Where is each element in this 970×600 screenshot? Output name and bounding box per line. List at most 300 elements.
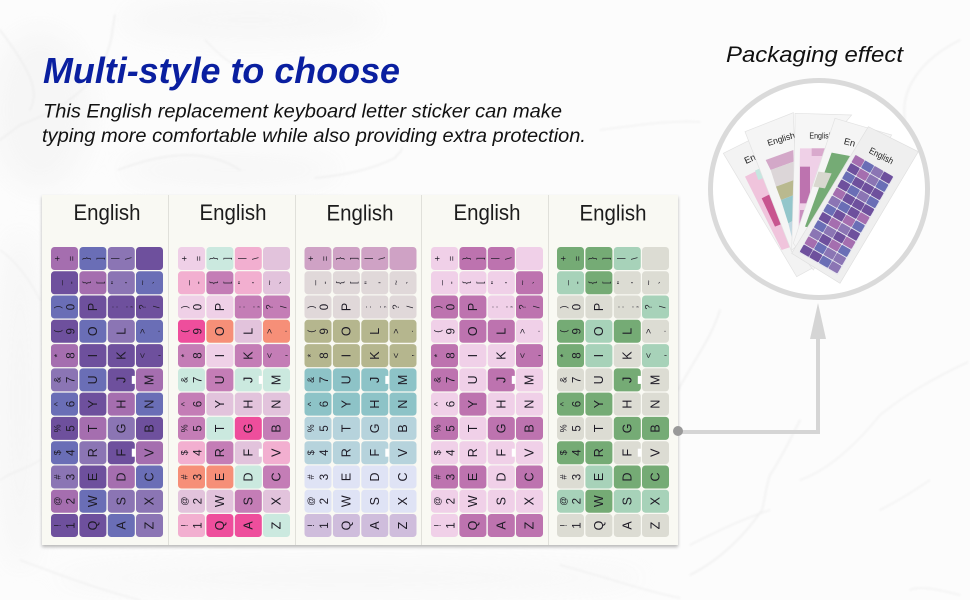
sheet 3 keys: pastel bands: % — [306, 424, 316, 432]
sheet 1 keys: purple: E — [86, 473, 100, 481]
sheet 1 keys: purple: ; — [123, 306, 133, 308]
sheet 1 keys: purple: F — [114, 449, 128, 457]
sheet 4 keys: two-tone pink: 1 — [446, 522, 458, 529]
sheet 5 keys: green: S — [620, 497, 634, 505]
sheet 4 keys: two-tone pink: E — [466, 473, 480, 481]
sheet 5 keys: green: T — [592, 424, 606, 432]
sheet 3 keys: pastel bands: A — [368, 521, 382, 530]
sheet 5 keys: green: 2 — [572, 498, 584, 504]
package: olive and teal — [745, 113, 798, 257]
sheet 2 keys: pink, mint and coral: 6 — [192, 401, 204, 407]
sheet 1 keys: purple: " — [109, 281, 119, 284]
sheet 1 keys: purple: Y — [86, 399, 100, 408]
sheet 4 keys: two-tone pink: 5 — [446, 425, 458, 432]
sheet 4 keys: two-tone pink: ; — [503, 306, 513, 308]
sheet 2 keys: pink, mint and coral: ; — [250, 306, 260, 308]
sheet 1 keys: purple: ! — [52, 524, 62, 527]
package: two-tone pink — [792, 113, 852, 250]
sheet 3 keys: pastel bands: _ — [306, 279, 316, 286]
sheet 2 keys: pink, mint and coral: < — [264, 353, 274, 358]
sheet 5 keys: green: $ — [558, 450, 568, 455]
sheet 4 keys: two-tone pink: X — [522, 496, 536, 505]
sheet 3 keys: pastel bands: ] — [348, 257, 358, 260]
sheet 5 keys: green: ? — [644, 304, 654, 310]
sheet 2 keys: pink, mint and coral: $ — [180, 450, 190, 455]
sheet 5 keys: green: N — [648, 400, 662, 409]
sheet 2 keys: pink, mint and coral: } — [208, 257, 218, 260]
sheet 3 keys: pastel bands: | — [363, 257, 373, 260]
description text: This English replacement keyboard letter sticker can make — [43, 100, 562, 122]
sheet 1 keys: purple: J — [114, 377, 128, 383]
sheet 2 keys: pink, mint and coral — [178, 247, 290, 537]
sheet 2 keys: pink, mint and coral: W — [213, 495, 227, 507]
sheet 1 keys: purple: Z — [142, 521, 156, 529]
sheet 4 keys: two-tone pink: ^ — [432, 401, 442, 406]
sheet 1 keys: purple: + — [52, 256, 62, 261]
sheet 1 keys: purple: / — [152, 305, 162, 308]
sheet 3 keys: pastel bands: U — [339, 375, 353, 384]
sheet 2 keys: pink, mint and coral: ) — [180, 306, 190, 308]
sheet 1 keys: purple: # — [52, 474, 62, 480]
sheet 3 keys: pastel bands: 5 — [319, 425, 331, 432]
sheet 4 keys: two-tone pink: Q — [466, 520, 480, 530]
sheet 2 keys: pink, mint and coral: = — [194, 256, 204, 261]
sheet 2 keys: pink, mint and coral: T — [213, 424, 227, 432]
sheet 5 keys: green: D — [620, 472, 634, 482]
sheet 2 keys: pink, mint and coral: K — [241, 351, 255, 360]
sheet 2 keys: pink, mint and coral: V — [270, 448, 284, 457]
sheet 2 keys: pink, mint and coral: | — [236, 257, 246, 260]
sheet 4 keys: two-tone pink: ~ — [518, 280, 528, 285]
sheet 3 keys: pastel bands: V — [396, 448, 410, 457]
sheet 5 keys: green: 8 — [572, 352, 584, 359]
sheet 4 keys: two-tone pink: R — [466, 448, 480, 457]
sheet 5 keys: green: Q — [592, 520, 606, 530]
sheet 2 keys: pink, mint and coral: # — [180, 474, 190, 480]
sheet 1 keys: purple: G — [114, 424, 128, 433]
sheet 3 keys: pastel bands: P — [339, 303, 353, 311]
sheet 2 heading: English — [200, 200, 266, 225]
sheet 4 keys: two-tone pink: { — [461, 281, 471, 284]
sheet 4 keys: two-tone pink: 6 — [446, 401, 458, 407]
sheet 3 keys: pastel bands: S — [368, 497, 382, 505]
sheet 5 keys: green: { — [587, 281, 597, 284]
sheet 2 keys: pink, mint and coral: 0 — [192, 304, 204, 310]
sheet 2 keys: pink, mint and coral: F — [241, 449, 255, 457]
sheet 3 keys: pastel bands: O — [339, 326, 353, 336]
title: Multi-style to choose — [43, 50, 400, 91]
sheet 1 keys: purple: ` — [152, 281, 162, 284]
sheet 1 keys: purple: 6 — [66, 401, 78, 407]
sheet 4 keys: two-tone pink: L — [494, 328, 508, 335]
sheet 5 keys: green: U — [592, 375, 606, 384]
sheet 1 keys: purple: % — [52, 424, 62, 432]
package: pink: En — [743, 152, 757, 166]
sheet 3 keys: pastel bands: N — [396, 400, 410, 409]
sheet 1 keys: purple: K — [114, 351, 128, 360]
sheet 4 keys: two-tone pink: % — [432, 424, 442, 432]
sheet 5 keys: green: 9 — [572, 328, 584, 335]
sheet 5 keys: green: ; — [629, 306, 639, 308]
sheet 1 keys: purple: - — [66, 281, 76, 284]
sheet 1 keys: purple: | — [109, 257, 119, 260]
sheet 2 keys: pink, mint and coral: R — [213, 448, 227, 457]
sheet 1 keys: purple: \ — [123, 257, 133, 260]
sheet 3 keys: pastel bands: 0 — [319, 304, 331, 310]
sheet 3 keys: pastel bands: ( — [306, 330, 316, 333]
sheet 3 keys: pastel bands: Z — [396, 521, 410, 529]
sheet 2 keys: pink, mint and coral: @ — [180, 497, 190, 506]
sheet 3 keys: pastel bands: + — [306, 256, 316, 261]
sheet 1 keys: purple: O — [86, 326, 100, 336]
sheet 2 keys: pink, mint and coral: 5 — [192, 425, 204, 432]
sheet 1 keys: purple: ' — [123, 282, 133, 284]
sheet 4 keys: two-tone pink: \ — [503, 257, 513, 260]
sheet 1 keys: purple: ~ — [138, 280, 148, 285]
sheet 2 keys: pink, mint and coral: , — [278, 354, 288, 357]
sheet 1 keys: purple: ) — [52, 306, 62, 308]
sheet 5 keys: green: / — [658, 305, 668, 308]
sheet 4 keys: two-tone pink: K — [494, 351, 508, 360]
sheet 3 keys: pastel bands: 6 — [319, 401, 331, 407]
sheet 3 keys: pastel bands: G — [368, 424, 382, 433]
sheet 5 keys: green: C — [648, 472, 662, 482]
sheet 1 keys: purple: * — [52, 353, 62, 357]
sheet 3 keys: pastel bands: . — [405, 330, 415, 333]
sheet 1 keys: purple — [51, 247, 163, 537]
sheet 1 keys: purple: [ — [95, 281, 105, 284]
sheet 4 keys: two-tone pink: | — [489, 257, 499, 260]
sheet 5 keys: green: V — [648, 448, 662, 457]
sheet 3 keys: pastel bands: " — [363, 281, 373, 284]
sheet 3 keys: pastel bands: M — [396, 375, 410, 385]
sheet 3 keys: pastel bands: K — [368, 351, 382, 360]
sheet 5 keys: green: B — [648, 424, 662, 433]
sheet 1 keys: purple: T — [86, 424, 100, 432]
sticker sheets row — [42, 195, 678, 545]
sheet 4 keys: two-tone pink: ( — [432, 330, 442, 333]
package: olive and teal: English — [766, 130, 796, 148]
sheet 4 keys: two-tone pink: < — [518, 353, 528, 358]
sheet 3 keys: pastel bands: } — [334, 257, 344, 260]
sheet 3 keys: pastel bands: J — [368, 377, 382, 383]
sheet 5 keys: green: M — [648, 375, 662, 385]
sheet 2 keys: pink, mint and coral: & — [180, 377, 190, 383]
sheet 1 keys: purple: ^ — [52, 401, 62, 406]
sheet 3 keys: pastel bands: 9 — [319, 328, 331, 335]
sheet 3 keys: pastel bands: 3 — [319, 474, 331, 480]
sheet 2 keys: pink, mint and coral: / — [278, 305, 288, 308]
sheet 4 keys: two-tone pink: S — [494, 497, 508, 505]
sheet 3 keys: pastel bands: Y — [339, 399, 353, 408]
sheet 1 keys: purple: U — [86, 375, 100, 384]
sheet 4 keys: two-tone pink: . — [532, 330, 542, 333]
sheet 5 keys: green: Y — [592, 399, 606, 408]
sheet 4 keys: two-tone pink: O — [466, 326, 480, 336]
sheet 2 keys: pink, mint and coral: ^ — [180, 401, 190, 406]
sheet 3 keys: pastel bands: Q — [339, 520, 353, 530]
sheet 5 keys: green: . — [658, 330, 668, 333]
sheet 3 keys: pastel bands: X — [396, 496, 410, 505]
sheet 2 keys: pink, mint and coral: 9 — [192, 328, 204, 335]
sheet 3 keys: pastel bands: ' — [377, 282, 387, 284]
sheet 2 keys: pink, mint and coral: C — [270, 472, 284, 482]
sheet 5 keys: green: ] — [601, 257, 611, 260]
sheet 4 keys: two-tone pink: Y — [466, 399, 480, 408]
sheet 2 keys: pink, mint and coral: L — [241, 328, 255, 335]
sheet 3 keys: pastel bands: R — [339, 448, 353, 457]
sheet 4 keys: two-tone pink: J — [494, 377, 508, 383]
sheet 1 keys: purple: & — [52, 377, 62, 383]
sheet 1 keys: purple: S — [114, 497, 128, 505]
sheet 5 keys: green: ~ — [644, 280, 654, 285]
sheet 2 keys: pink, mint and coral: D — [241, 472, 255, 482]
sheet 5 keys: green: : — [615, 306, 625, 308]
sheet 3 keys: pastel bands: ; — [377, 306, 387, 308]
sheet 5 keys: green: ( — [558, 330, 568, 333]
sheet 1 keys: purple: ? — [138, 304, 148, 310]
sheet 1 keys: purple: 8 — [66, 352, 78, 359]
sheet 4 keys: two-tone pink: & — [432, 377, 442, 383]
sheet 2 keys: pink, mint and coral: ' — [250, 282, 260, 284]
sheet 2 keys: pink, mint and coral: A — [241, 521, 255, 530]
sheet 5 keys: green: \ — [629, 257, 639, 260]
sheet 5 keys: green: - — [572, 281, 582, 284]
sheet 5 keys: green: 7 — [572, 377, 584, 383]
sheet 2 keys: pink, mint and coral: B — [270, 424, 284, 433]
sheet 1 keys: purple: 3 — [66, 474, 78, 480]
sheet 2 keys: pink, mint and coral: X — [270, 496, 284, 505]
sheet 3 keys: pastel bands: ? — [391, 304, 401, 310]
sheet 5 keys: green: % — [558, 424, 568, 432]
sheet 5 keys: green: 0 — [572, 304, 584, 310]
sheet 4 keys: two-tone pink: / — [532, 305, 542, 308]
sheet 5 keys: green: I — [592, 354, 606, 357]
sheet 5 keys: green: L — [620, 328, 634, 335]
package: purple front: English — [867, 146, 895, 166]
sheet 1 keys: purple: > — [138, 329, 148, 334]
sheet 5 keys: green: 6 — [572, 401, 584, 407]
sheet 5 keys: green: | — [615, 257, 625, 260]
sheet 2 keys: pink, mint and coral: Q — [213, 520, 227, 530]
package: purple front — [792, 127, 918, 283]
sheet 4 keys: two-tone pink: I — [466, 354, 480, 357]
sheet 2 keys: pink, mint and coral: 2 — [192, 498, 204, 504]
sheet 2 keys: pink, mint and coral: _ — [180, 279, 190, 286]
sheet 1 keys: purple: L — [114, 328, 128, 335]
sheet 4 keys: two-tone pink: # — [432, 474, 442, 480]
sheet 2 keys: pink, mint and coral: * — [180, 353, 190, 357]
sheet 4 keys: two-tone pink: * — [432, 353, 442, 357]
sheet 2 keys: pink, mint and coral: \ — [250, 257, 260, 260]
sheet 3 keys: pastel bands: B — [396, 424, 410, 433]
sheet 5 keys: green: + — [558, 256, 568, 261]
sheet 2 keys: pink, mint and coral: 3 — [192, 474, 204, 480]
sheet 3 keys: pastel bands: , — [405, 354, 415, 357]
sheet backing cards — [42, 195, 678, 545]
sheet 1 keys: purple: 9 — [66, 328, 78, 335]
sheet 5 keys: green: Z — [648, 521, 662, 529]
sheet 2 keys: pink, mint and coral: 8 — [192, 352, 204, 359]
sheet 1 keys: purple: P — [86, 303, 100, 311]
sheet 3 keys: pastel bands: 8 — [319, 352, 331, 359]
sheet 5 keys: green: < — [644, 353, 654, 358]
sheet 4 keys: two-tone pink: " — [489, 281, 499, 284]
sheet 2 keys: pink, mint and coral: ] — [222, 257, 232, 260]
sheet 1 keys: purple: < — [138, 353, 148, 358]
sheet 4 heading: English — [454, 200, 520, 225]
sheet 1 keys: purple: W — [86, 495, 100, 507]
sheet 4 keys: two-tone pink: 3 — [446, 474, 458, 480]
sheet 1 keys: purple: D — [114, 472, 128, 482]
sheet 2 keys: pink, mint and coral: M — [270, 375, 284, 385]
sheet 2 keys: pink, mint and coral: : — [236, 306, 246, 308]
sheet 3 keys: pastel bands: @ — [306, 497, 316, 506]
sheet 2 keys: pink, mint and coral: 1 — [192, 522, 204, 529]
sheet 4 keys: two-tone pink: B — [522, 424, 536, 433]
sheet 3 keys: pastel bands: [ — [348, 281, 358, 284]
sheet 5 keys: green: 3 — [572, 474, 584, 480]
sheet 1 keys: purple: 2 — [66, 498, 78, 504]
sheet 3 keys: pastel bands: # — [306, 474, 316, 480]
sheet 2 keys: pink, mint and coral: + — [180, 256, 190, 261]
sheet 4 keys: two-tone pink: M — [522, 375, 536, 385]
sheet 3 keys: pastel bands: : — [363, 306, 373, 308]
sheet 1 keys: purple: @ — [52, 497, 62, 506]
sheet 2 keys: pink, mint and coral: ( — [180, 330, 190, 333]
sheet 3 keys: pastel bands: ! — [306, 524, 316, 527]
sheet 2 keys: pink, mint and coral: [ — [222, 281, 232, 284]
sheet 3 keys: pastel bands: 4 — [319, 449, 331, 456]
sheet 4 keys: two-tone pink: ! — [432, 524, 442, 527]
sheet 3 keys: pastel bands: < — [391, 353, 401, 358]
sheet 2 keys: pink, mint and coral: Y — [213, 399, 227, 408]
sheet 4 keys: two-tone pink: , — [532, 354, 542, 357]
package: pink — [723, 135, 815, 277]
sheet 2 keys: pink, mint and coral: P — [213, 303, 227, 311]
sheet 3 keys: pastel bands: * — [306, 353, 316, 357]
sheet 4 keys: two-tone pink: C — [522, 472, 536, 482]
sheet 4 keys: two-tone pink: W — [466, 495, 480, 507]
sheet 2 keys: pink, mint and coral: - — [194, 281, 204, 284]
sheet 1 keys: purple: , — [152, 354, 162, 357]
sheet 1 keys: purple: N — [142, 400, 156, 409]
sheet 3 keys: pastel bands: ~ — [391, 280, 401, 285]
sheet 3 keys: pastel bands: W — [339, 495, 353, 507]
sheet 3 keys: pastel bands: ) — [306, 306, 316, 308]
sheet 1 keys: purple: { — [81, 281, 91, 284]
sheet 1 keys: purple: 7 — [66, 377, 78, 383]
sheet 4 keys: two-tone pink: ) — [432, 306, 442, 308]
sheet 4 keys: two-tone pink: + — [432, 256, 442, 261]
sheet 1 keys: purple: _ — [52, 279, 62, 286]
sheet 4 keys: two-tone pink: - — [446, 281, 456, 284]
sheet 1 keys: purple: B — [142, 424, 156, 433]
sheet 3 keys: pastel bands: H — [368, 400, 382, 409]
sheet 3 keys: pastel bands: \ — [377, 257, 387, 260]
sheet 2 keys: pink, mint and coral: " — [236, 281, 246, 284]
sheet 5 keys: green: * — [558, 353, 568, 357]
sheet 3 heading: English — [326, 200, 394, 226]
packaging effect label: Packaging effect — [726, 42, 905, 67]
sheet 1 keys: purple: 5 — [66, 425, 78, 432]
sheet 4 keys: two-tone pink: G — [494, 424, 508, 433]
sheet 5 keys: green: " — [615, 281, 625, 284]
sheet 3 keys: pastel bands — [304, 247, 416, 537]
sheet 3 keys: pastel bands: T — [339, 424, 353, 432]
sheet 2 keys: pink, mint and coral: > — [264, 329, 274, 334]
sheet 5 keys: green — [557, 247, 669, 537]
sheet 4 keys: two-tone pink: _ — [432, 279, 442, 286]
package: green — [793, 118, 892, 270]
sheet 4 keys: two-tone pink: @ — [432, 497, 442, 506]
sheet 5 keys: green: W — [592, 495, 606, 507]
sheet 1 keys: purple: ( — [52, 330, 62, 333]
sheet 1 keys: purple: : — [109, 306, 119, 308]
sheet 1 keys: purple: X — [142, 496, 156, 505]
sheet 1 keys: purple: V — [142, 448, 156, 457]
sheet 4 keys: two-tone pink: 4 — [446, 449, 458, 456]
sheet 4 keys: two-tone pink: ` — [532, 281, 542, 284]
sheet 5 keys: green: H — [620, 400, 634, 409]
sheet 1 keys: purple: = — [66, 256, 76, 261]
sheet 3 keys: pastel bands: ` — [405, 281, 415, 284]
package: two-tone pink: English — [809, 130, 833, 140]
sheet 1 keys: purple: Q — [86, 520, 100, 530]
sheet 1 keys: purple: $ — [52, 450, 62, 455]
sheet 5 keys: green: ` — [658, 281, 668, 284]
sheet 3 keys: pastel bands: 7 — [319, 377, 331, 383]
sheet 5 keys: green: R — [592, 448, 606, 457]
sheet 4 keys: two-tone pink: P — [466, 303, 480, 311]
sheet 4 keys: two-tone pink: D — [494, 472, 508, 482]
sheet 4 keys: two-tone pink: Z — [522, 521, 536, 529]
sheet 3 keys: pastel bands: - — [320, 281, 330, 284]
sheet 5 keys: green: , — [658, 354, 668, 357]
sheet 4 keys: two-tone pink: 7 — [446, 377, 458, 383]
sheet 2 keys: pink, mint and coral: % — [180, 424, 190, 432]
sheet 2 keys: pink, mint and coral: ~ — [264, 280, 274, 285]
sheet 3 keys: pastel bands: = — [320, 256, 330, 261]
sheet 3 keys: pastel bands: ^ — [306, 401, 316, 406]
connector arrow from sheet to packaging — [673, 303, 826, 436]
sheet 4 keys: two-tone pink: [ — [475, 281, 485, 284]
sheet 4 keys: two-tone pink: 0 — [446, 304, 458, 310]
sheet 4 keys: two-tone pink: F — [494, 449, 508, 457]
sheet 3 keys: pastel bands: L — [368, 328, 382, 335]
description text: typing more comfortable while also providing extra protection. — [42, 125, 586, 147]
sheet 4 keys: two-tone pink: : — [489, 306, 499, 308]
sheet 2 keys: pink, mint and coral: ` — [278, 281, 288, 284]
package: green: En — [843, 136, 856, 149]
sheet 1 keys: purple: I — [86, 354, 100, 357]
sheet 5 keys: green: 1 — [572, 522, 584, 529]
sheet 2 keys: pink, mint and coral: Z — [270, 521, 284, 529]
sheet 1 keys: purple: H — [114, 400, 128, 409]
sheet 3 keys: pastel bands: D — [368, 472, 382, 482]
sheet 3 keys: pastel bands: & — [306, 377, 316, 383]
sheet 4 keys: two-tone pink: $ — [432, 450, 442, 455]
sheet 5 keys: green: & — [558, 377, 568, 383]
sheet 5 keys: green: _ — [558, 279, 568, 286]
sheet 5 keys: green: # — [558, 474, 568, 480]
description text — [42, 100, 586, 147]
sheet 1 keys: purple: M — [142, 375, 156, 385]
sheet 1 heading: English — [74, 200, 140, 225]
sheet 2 keys: pink, mint and coral: N — [270, 400, 284, 409]
sheet 5 keys: green: G — [620, 424, 634, 433]
sheet 1 keys: purple: C — [142, 472, 156, 482]
